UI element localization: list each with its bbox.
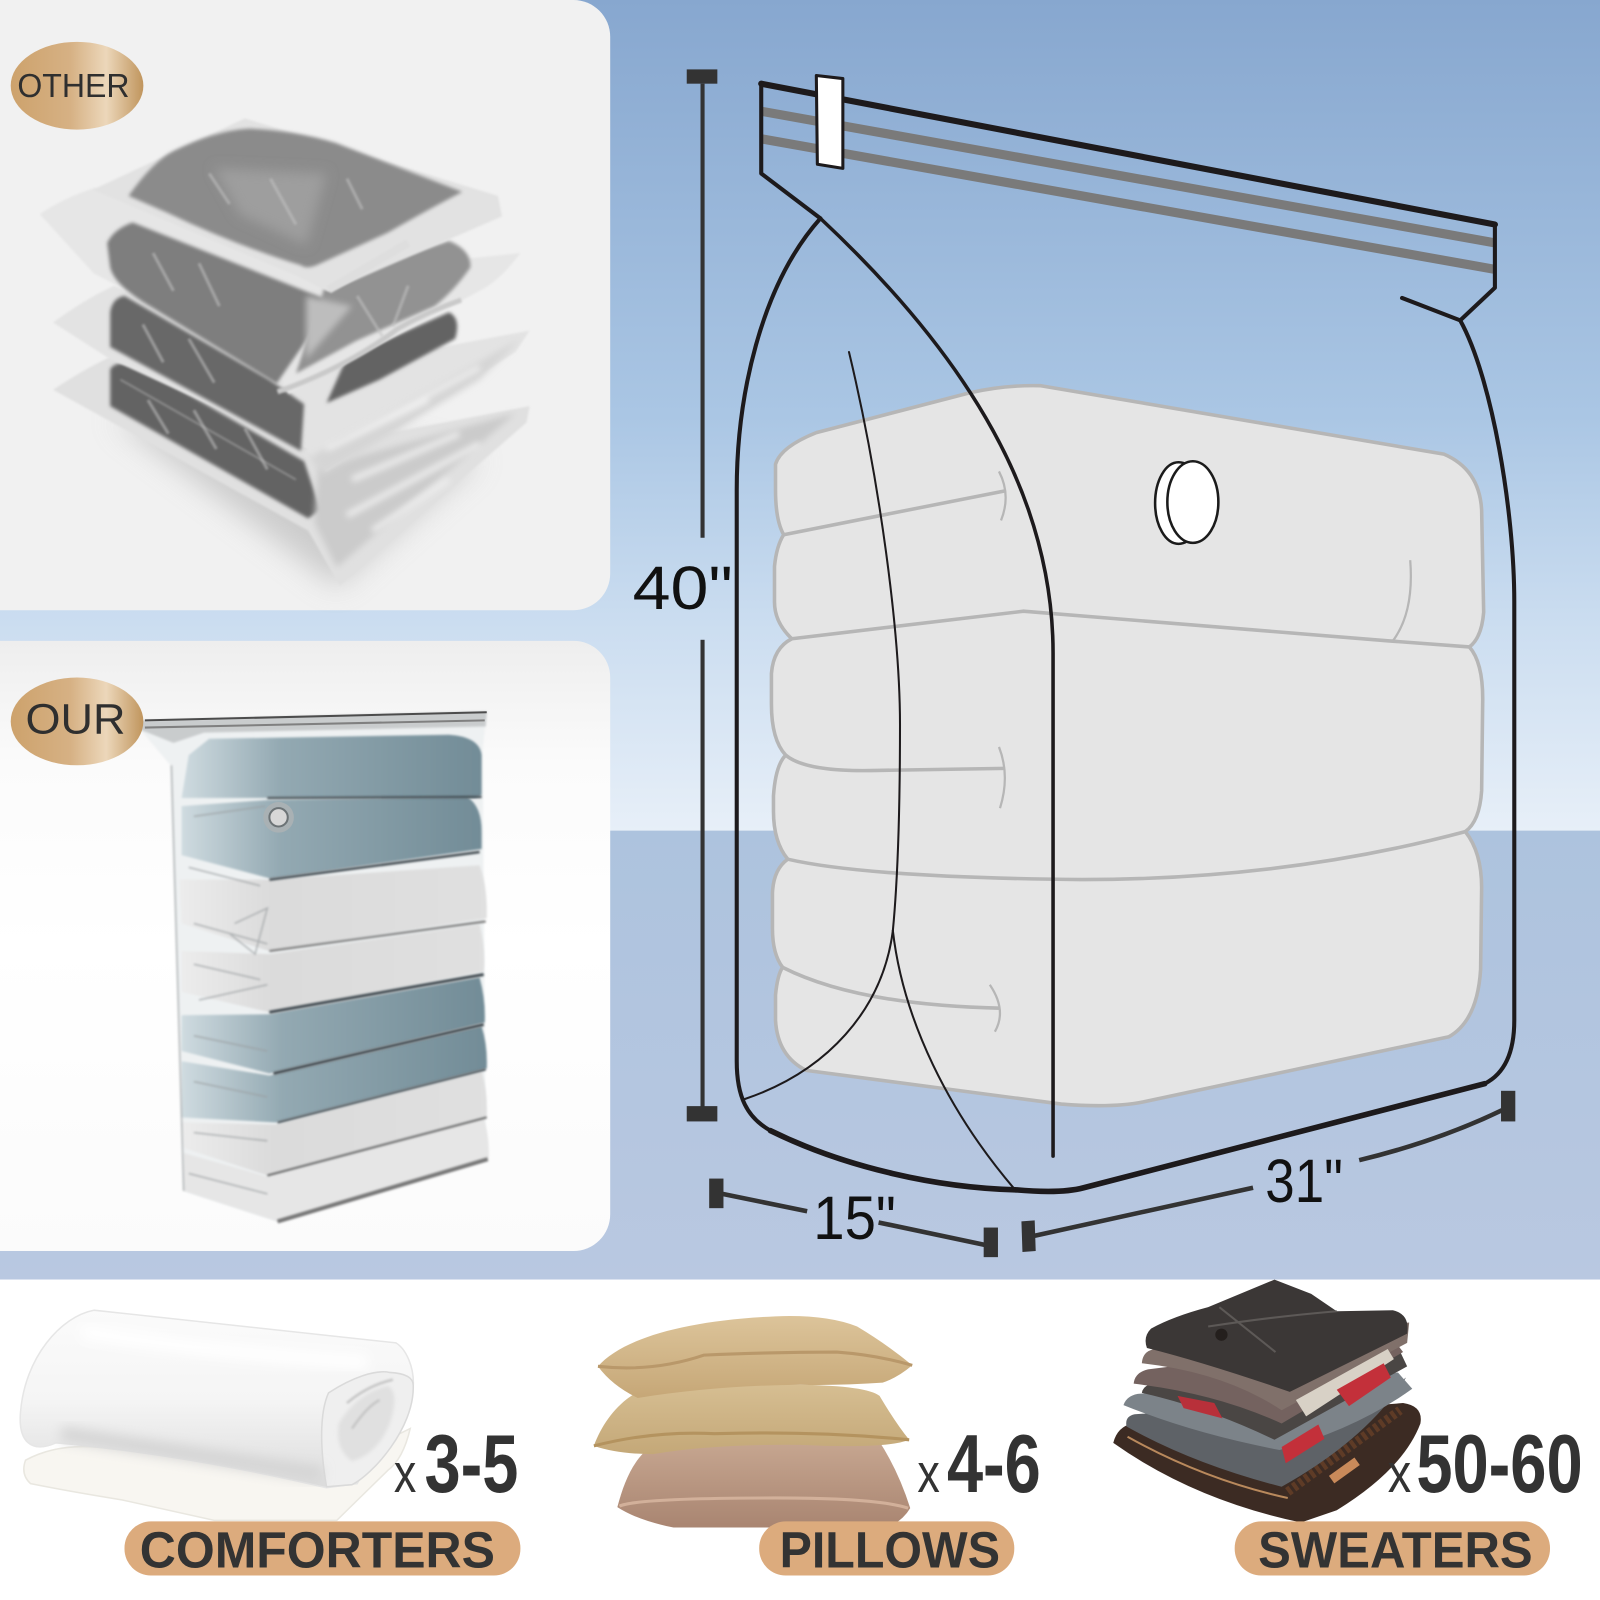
zip stripes [761,111,1495,269]
wrinkles [143,173,408,469]
panel: other bags [0,0,610,610]
top bag film [93,118,502,292]
background: white footer [0,1280,1600,1600]
layer 5 blue [182,978,485,1073]
fold shadows [267,797,488,1221]
dimension: depth 15 inches: 15" [813,1184,896,1252]
group: comforters [20,1310,520,1578]
layer 1 blue [182,735,482,798]
label pill: comforters: COMFORTERS [140,1521,495,1578]
badge: OTHER [11,42,143,130]
layer 3 white [180,865,487,951]
dimension: width 31 inches: 31" [1265,1147,1343,1215]
third bag contents [110,296,304,451]
dimension: width 31 inches [1021,1091,1515,1252]
folded comforter inside bag [771,386,1484,1106]
count: 50-60: x [1388,1442,1411,1504]
zip seal [138,711,487,743]
count: 3-5: 3-5 [424,1417,518,1510]
second bag contents [107,222,333,384]
bottom brown sweater [1113,1403,1421,1522]
top bag contents [129,129,462,267]
panel: our bag [0,641,610,1251]
layer 4 white [182,924,484,1012]
dimension: height 40 inches: 40" [633,554,733,622]
photo: rolled comforter [20,1310,413,1520]
background: lower blue band [0,831,1600,1280]
layer 8 white [184,1118,489,1221]
dimension: height 40 inches [633,69,733,1121]
group: sweaters [1113,1280,1583,1578]
zip slider [816,76,843,168]
dimension: depth 15 inches [709,1179,998,1257]
badge: OTHER: OTHER [17,68,130,105]
label pill: sweaters: SWEATERS [1258,1521,1533,1578]
photo: tall vacuum bag with folded bedding [138,711,489,1221]
second bag film [40,188,520,394]
layer 6 blue [182,1027,487,1122]
photo: stack of flat bags [40,118,530,587]
third bag film [53,286,530,471]
side creases [171,765,267,1194]
badge: OUR: OUR [26,696,126,744]
top cardigan [1146,1280,1408,1392]
valve [263,802,294,833]
diagram: bag with dimensions [633,69,1515,1257]
photo: stacked sweaters [1113,1280,1421,1522]
count: 4-6 [917,1417,1041,1510]
count: 3-5: x [394,1442,416,1504]
badge: OUR [11,678,143,765]
group: pillows [594,1316,1041,1578]
label pill: pillows: PILLOWS [780,1521,1000,1578]
layer 2 blue [182,797,482,879]
valve [1155,461,1218,544]
bag film [138,712,487,1221]
bottom bag contents [110,363,320,518]
bottom bag film [53,355,530,586]
count: 4-6: x [917,1442,940,1504]
photo: stacked pillows [594,1316,912,1528]
bag outline [737,84,1514,1191]
count: 3-5 [394,1417,518,1510]
layer 7 white [182,1071,487,1176]
grey sweaters [1126,1378,1406,1487]
background: sky gradient [0,0,1600,831]
count: 4-6: 4-6 [947,1417,1041,1510]
